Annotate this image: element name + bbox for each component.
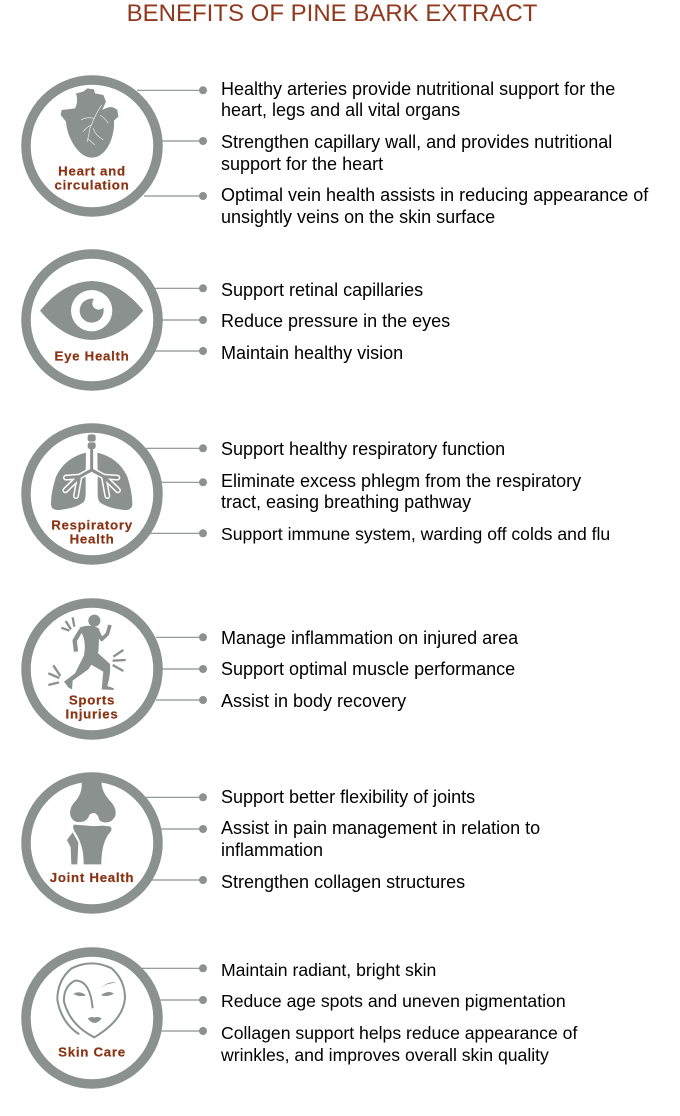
panel: sports injuries — [26, 603, 519, 735]
benefits: eye: Reduce pressure in the eyes — [221, 311, 450, 331]
label: Heart and circulation: Heart and — [58, 164, 126, 178]
benefits: skin: wrinkles, and improves overall skin quality — [220, 1045, 549, 1065]
label: Sports Injuries: Injuries — [66, 706, 118, 722]
benefits: eye: Support retinal capillaries — [221, 280, 423, 300]
benefits: respiratory: Support healthy respiratory function — [221, 439, 505, 459]
benefits: joint: inflammation — [221, 840, 323, 860]
benefits: heart: Healthy arteries provide nutritional support for the — [221, 79, 615, 99]
icon: knee joint — [67, 775, 116, 864]
connectors and ring — [26, 777, 207, 909]
icon: runner — [48, 615, 126, 690]
benefits: respiratory: Support immune system, warding off colds and flu — [221, 524, 610, 544]
benefits: eye: Maintain healthy vision — [221, 343, 403, 363]
icon: eye — [40, 281, 143, 340]
connectors and ring — [26, 603, 207, 735]
label: Sports Injuries: Sports — [69, 692, 115, 708]
benefits: respiratory: tract, easing breathing pathway — [221, 492, 471, 512]
connectors and ring — [26, 428, 207, 560]
icon: face — [57, 963, 125, 1037]
label: Joint Health: Joint Health — [50, 870, 134, 885]
panel: respiratory health — [26, 428, 610, 560]
benefits: joint: Assist in pain management in relation to — [221, 818, 540, 838]
benefits: sports: Support optimal muscle performance — [221, 659, 515, 679]
benefits: heart: Optimal vein health assists in reducing appearance of — [221, 185, 649, 205]
panel: joint health — [26, 775, 540, 909]
icon: heart — [61, 88, 118, 158]
benefits: heart: support for the heart — [221, 154, 383, 174]
benefits: heart: heart, legs and all vital organs — [221, 100, 460, 120]
benefits: sports: Assist in body recovery — [221, 691, 406, 711]
title: BENEFITS OF PINE BARK EXTRACT — [127, 0, 538, 27]
connectors and ring — [26, 254, 207, 386]
connectors and ring — [26, 952, 207, 1084]
panel: eye health — [26, 254, 450, 386]
icon: lungs — [51, 434, 132, 510]
label: Skin Care: Skin Care — [58, 1044, 126, 1060]
label: Respiratory Health: Respiratory — [51, 518, 133, 532]
benefits: respiratory: Eliminate excess phlegm from the respiratory — [221, 471, 581, 491]
benefits: heart: Strengthen capillary wall, and provides nutritional — [221, 132, 612, 152]
panel: skin care — [26, 952, 577, 1084]
label: Eye Health: Eye Health — [54, 348, 130, 364]
label: Respiratory Health: Health — [70, 532, 114, 546]
benefits: skin: Collagen support helps reduce appearance of — [221, 1023, 577, 1043]
benefits: joint: Strengthen collagen structures — [221, 872, 465, 892]
benefits: skin: Reduce age spots and uneven pigmentation — [221, 991, 566, 1011]
benefits: joint: Support better flexibility of joints — [221, 787, 475, 807]
benefits: heart: unsightly veins on the skin surface — [221, 207, 495, 227]
benefits: sports: Manage inflammation on injured area — [221, 628, 519, 648]
panel: heart and circulation — [26, 79, 649, 227]
benefits: skin: Maintain radiant, bright skin — [221, 960, 436, 980]
label: Heart and circulation: circulation — [55, 178, 129, 192]
connectors and ring — [26, 80, 207, 212]
